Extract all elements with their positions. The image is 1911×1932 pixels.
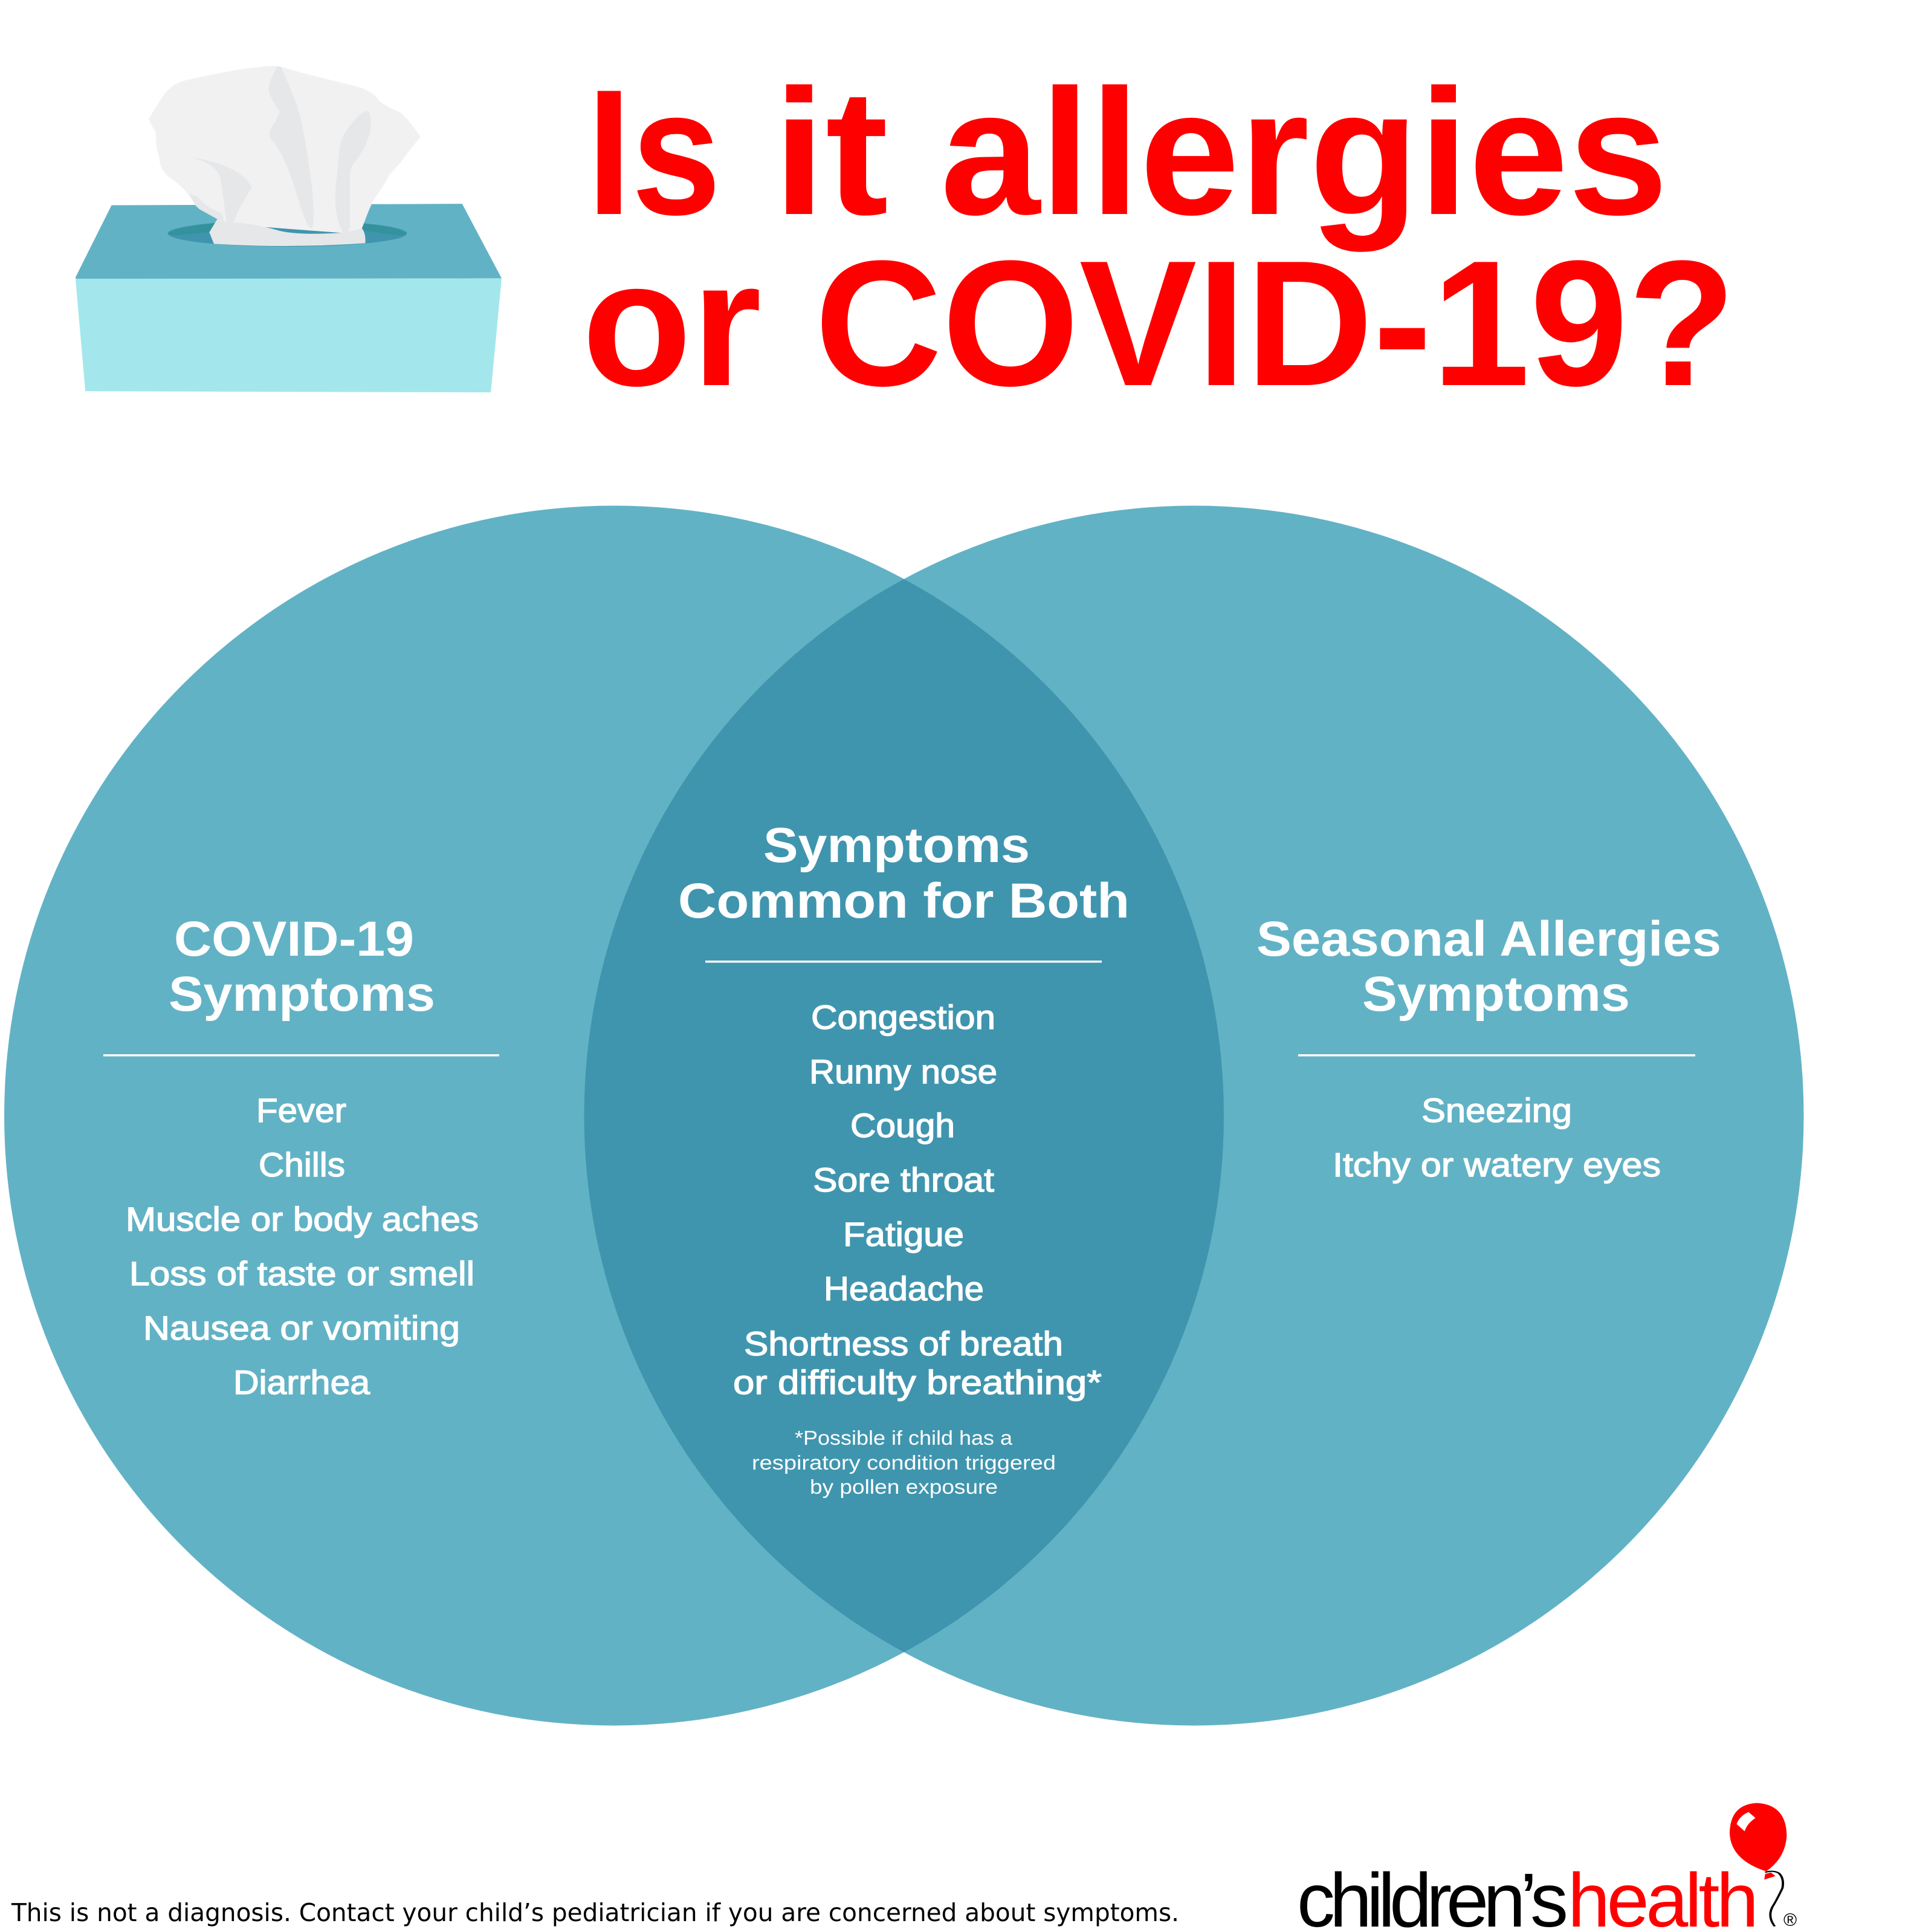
- icon: red balloon: [1730, 1803, 1787, 1927]
- title: allergies: [940, 52, 1668, 253]
- footnote: [752, 1427, 1056, 1498]
- footnote: respiratory condition triggered: [752, 1451, 1056, 1474]
- icon: tissue box: [76, 66, 502, 392]
- tissue box top: [76, 204, 502, 279]
- title: or: [582, 223, 761, 423]
- list: common symptoms: Headache: [824, 1269, 984, 1308]
- list: common symptoms: Sore throat: [813, 1161, 994, 1199]
- list: COVID-19 symptoms: Muscle or body aches: [126, 1200, 479, 1238]
- title: [582, 52, 1736, 423]
- heading: Symptoms Common for Both: Symptoms: [763, 818, 1030, 873]
- list: common symptoms: or difficulty breathing*: [733, 1363, 1102, 1401]
- tissue: [149, 66, 421, 246]
- circle: seasonal allergies: [584, 505, 1803, 1725]
- heading: Seasonal Allergies Symptoms: Seasonal Allergies: [1256, 912, 1721, 967]
- title: COVID-19?: [815, 223, 1736, 423]
- heading: Seasonal Allergies Symptoms: Symptoms: [1362, 967, 1630, 1022]
- heading: Symptoms Common for Both: Common for Both: [678, 874, 1130, 929]
- list: COVID-19 symptoms: Loss of taste or smell: [129, 1254, 474, 1292]
- list: COVID-19 symptoms: Diarrhea: [233, 1363, 370, 1401]
- disclaimer: This is not a diagnosis. Contact your child’s pediatrician if you are concerned about symptoms.: [11, 1898, 1179, 1927]
- registered mark: ®: [1783, 1910, 1797, 1930]
- footnote: *Possible if child has a: [795, 1427, 1013, 1449]
- logo: children's health: [1297, 1803, 1797, 1932]
- logo wordmark: [1297, 1858, 1759, 1932]
- list: common symptoms: Fatigue: [843, 1215, 964, 1253]
- title: it: [773, 52, 888, 252]
- list: allergy symptoms: [1333, 1091, 1661, 1184]
- title: Is: [587, 52, 721, 252]
- list: COVID-19 symptoms: [126, 1091, 479, 1401]
- list: COVID-19 symptoms: Chills: [259, 1146, 345, 1184]
- panel: COVID-19 symptoms: [103, 912, 499, 1401]
- heading: Seasonal Allergies Symptoms: [1256, 912, 1721, 1022]
- list: common symptoms: Runny nose: [809, 1052, 997, 1091]
- heading: Symptoms Common for Both: [678, 818, 1130, 929]
- overlap: common symptoms: [584, 579, 1224, 1652]
- list: COVID-19 symptoms: Nausea or vomiting: [143, 1309, 460, 1347]
- footnote: by pollen exposure: [810, 1476, 998, 1498]
- list: common symptoms: Congestion: [811, 998, 995, 1036]
- list: COVID-19 symptoms: Fever: [256, 1091, 346, 1129]
- tissue box opening: [167, 220, 407, 247]
- panel: seasonal allergies symptoms: [1256, 912, 1721, 1184]
- venn diagram: [4, 505, 1803, 1725]
- list: common symptoms: Shortness of breath: [744, 1324, 1063, 1363]
- heading: COVID-19 Symptoms: Symptoms: [169, 967, 435, 1022]
- list: allergy symptoms: Itchy or watery eyes: [1333, 1146, 1661, 1184]
- heading: COVID-19 Symptoms: COVID-19: [174, 912, 414, 967]
- tissue box front: [76, 278, 502, 392]
- list: common symptoms: Cough: [850, 1106, 955, 1144]
- heading: COVID-19 Symptoms: [169, 912, 435, 1022]
- panel: symptoms common for both: [678, 818, 1130, 1498]
- circle: COVID-19: [4, 505, 1224, 1725]
- list: allergy symptoms: Sneezing: [1421, 1091, 1572, 1129]
- list: common symptoms: [733, 998, 1102, 1401]
